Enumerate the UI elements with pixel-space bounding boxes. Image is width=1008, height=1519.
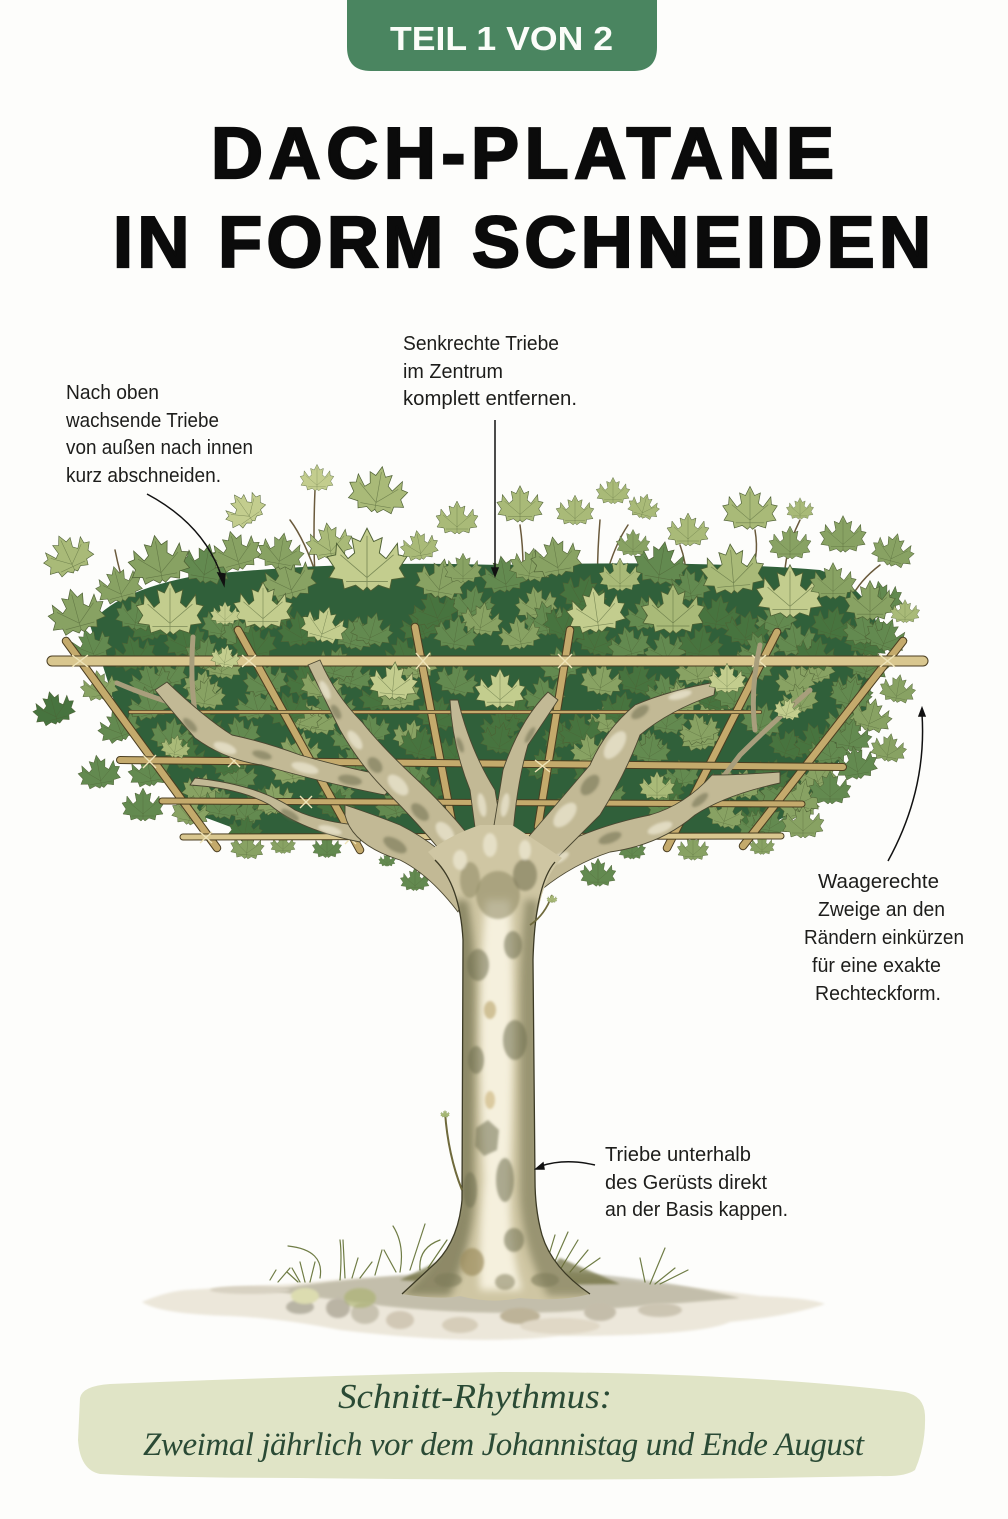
- arrow: horizontal branches: [888, 708, 925, 861]
- inner leaves, shifted layer: [113, 583, 893, 831]
- title: DACH-PLATANE: [211, 114, 834, 194]
- horizontal poles: [52, 661, 923, 837]
- callout: horizontal branches: [804, 871, 964, 1005]
- arrow: vertical shoots: [492, 420, 498, 576]
- banner: cutting rhythm: Schnitt-Rhythmus:: [338, 1377, 612, 1416]
- canopy base mass: [90, 563, 880, 836]
- twig near crown: [530, 895, 552, 925]
- title: IN FORM SCHNEIDEN: [113, 203, 931, 283]
- arrow: upward shoots: [147, 494, 225, 585]
- canopy leaves: inner and outer layers: [29, 462, 920, 891]
- diagonal poles: [66, 627, 903, 850]
- trunk: [400, 825, 595, 1301]
- inner leaves, top layer: [108, 597, 888, 845]
- badge: part 1 of 2: TEIL 1 VON 2: [390, 20, 613, 57]
- canopy edge leaves: [65, 537, 912, 838]
- front leaves: [159, 642, 804, 1117]
- callout: upward shoots: wachsende Triebe: [65, 410, 219, 432]
- twigs above canopy: [115, 490, 880, 650]
- banner: cutting rhythm: Zweimal jährlich vor dem Johannistag und Ende August: [143, 1427, 865, 1463]
- callout: vertical shoots: [403, 333, 577, 410]
- badge: part 1 of 2: [347, 0, 657, 71]
- callout: horizontal branches: Waagerechte: [818, 871, 939, 893]
- callout: horizontal branches: Zweige an den: [818, 899, 945, 921]
- callout: shoots below the frame: [605, 1144, 788, 1221]
- arrow: trunk shoots: [536, 1162, 595, 1169]
- callout: vertical shoots: Senkrechte Triebe: [403, 333, 559, 355]
- callout: upward shoots: von außen nach innen: [66, 437, 253, 459]
- banner: cutting rhythm: [78, 1372, 925, 1480]
- callout: shoots below the frame: an der Basis kappen.: [605, 1199, 788, 1221]
- inner leaves, mirrored layer: [125, 567, 905, 815]
- callout: horizontal branches: für eine exakte: [812, 955, 941, 977]
- title: [113, 114, 931, 283]
- callout: horizontal branches: Rechteckform.: [815, 983, 941, 1005]
- callout: vertical shoots: im Zentrum: [403, 361, 503, 383]
- ground: [142, 1224, 825, 1340]
- trunk outline: [402, 860, 590, 1294]
- branches: [117, 637, 810, 912]
- callout: vertical shoots: komplett entfernen.: [403, 388, 577, 410]
- callout: upward shoots: Nach oben: [66, 382, 159, 404]
- callout: shoots below the frame: des Gerüsts direkt: [605, 1172, 767, 1194]
- bamboo frame: [52, 627, 923, 850]
- callout: horizontal branches: Rändern einkürzen: [804, 927, 964, 949]
- rope ties: [72, 653, 895, 844]
- tree: [29, 462, 923, 1301]
- callout: shoots below the frame: Triebe unterhalb: [605, 1144, 751, 1166]
- outer and upper leaves: [29, 462, 920, 891]
- branch bark patches: [181, 679, 710, 866]
- bark patches: [434, 833, 559, 1290]
- twig on trunk: [445, 1112, 462, 1190]
- callout: upward shoots: kurz abschneiden.: [66, 465, 221, 487]
- callout: upward shoots: [65, 382, 253, 487]
